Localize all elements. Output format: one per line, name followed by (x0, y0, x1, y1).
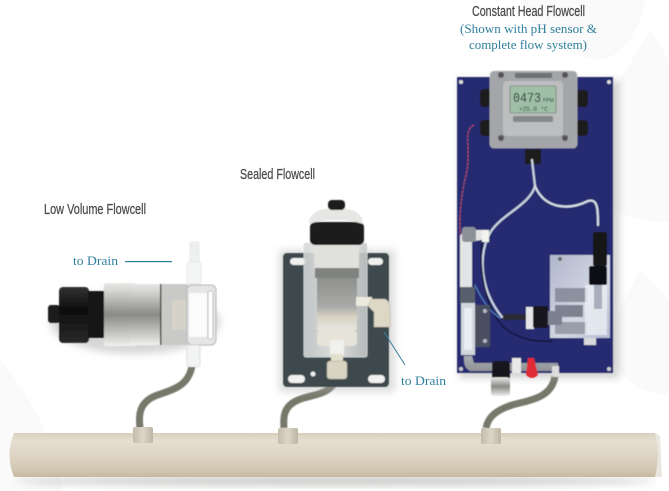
analyzer display unit: PPM (543, 98, 554, 104)
title: Constant Head Flowcell: Constant Head Flowcell (472, 4, 585, 20)
pipe fitting 1 (133, 427, 153, 443)
analyzer display unit (490, 71, 577, 148)
analyzer cables (480, 89, 588, 164)
tube: sealed to pipe (284, 378, 337, 428)
drain leader line 2 (384, 332, 405, 365)
sealed flowcell (279, 200, 395, 392)
pipe shadow (15, 476, 655, 486)
title: Sealed Flowcell: Sealed Flowcell (240, 167, 315, 183)
main pipe (10, 433, 662, 477)
subtitle: shown with pH sensor: (Shown with pH sensor & (460, 22, 597, 36)
subtitle: shown with pH sensor: complete flow system) (469, 38, 587, 52)
analyzer display unit: +25.0 °C (519, 106, 548, 113)
drain leader line 1 (125, 261, 172, 262)
tube: low volume to pipe (139, 366, 192, 428)
low volume flowcell (48, 242, 220, 367)
drain fitting below panel (491, 377, 510, 396)
flowmeter assembly (460, 227, 490, 355)
red valve handle (526, 358, 538, 378)
constant head flowcell panel (457, 71, 619, 380)
flow cell block (550, 232, 610, 345)
title: Low Volume Flowcell: Low Volume Flowcell (44, 202, 146, 218)
bottom plumbing (464, 356, 559, 380)
tube: constant head to pipe (486, 376, 555, 428)
subtitle: shown with pH sensor (460, 22, 597, 52)
sensor cable red (460, 125, 474, 250)
sensor tubes (475, 160, 598, 341)
to Drain label 2: to Drain (401, 374, 447, 388)
sensor connector (503, 306, 562, 329)
analyzer display unit: 0473 (513, 91, 541, 107)
pipe fitting 3 (481, 428, 501, 444)
to Drain label 1: to Drain (73, 254, 119, 268)
pipe fitting 2 (278, 428, 298, 444)
